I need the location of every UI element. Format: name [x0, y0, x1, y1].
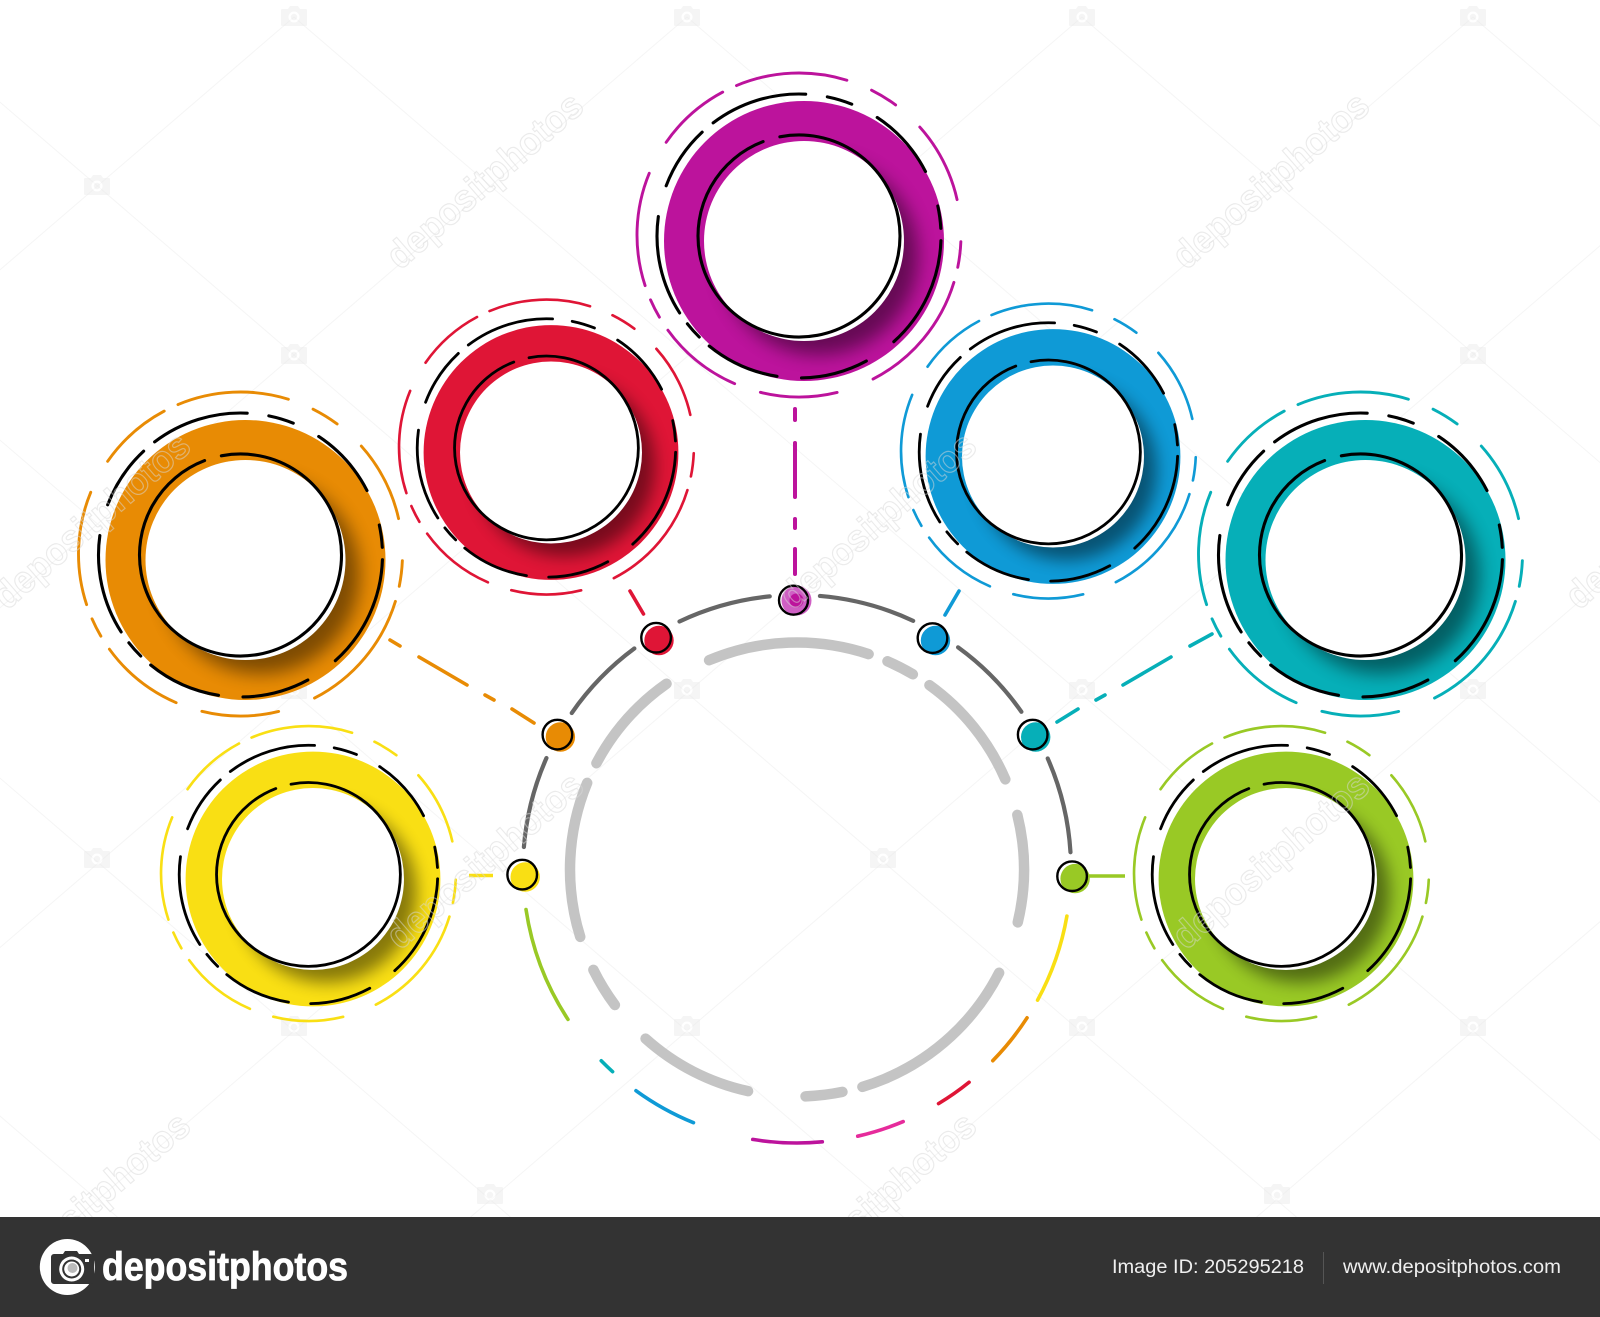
footer bar	[0, 1217, 1600, 1317]
node: blue	[918, 623, 950, 655]
watermark camera icons	[84, 6, 1486, 1204]
footer divider	[1323, 1252, 1324, 1284]
node: purple	[779, 586, 812, 616]
hub arc: dark grey upper segments	[414, 486, 1180, 1252]
watermark text: depositphotos	[1165, 84, 1378, 277]
watermark text: depositphotos	[379, 84, 592, 277]
ring: green	[1089, 681, 1474, 1066]
image id: Image ID: 205295218	[1112, 1257, 1304, 1278]
node: yellow	[507, 860, 540, 892]
ring: red	[354, 254, 739, 640]
central dashed grey circle	[500, 572, 1094, 1167]
footer logo icon: camera	[40, 1239, 95, 1295]
hub arc: coloured lower segments	[410, 482, 1184, 1256]
connector: blue	[945, 591, 959, 615]
connector: yellow	[469, 874, 493, 877]
watermark text: depositphotos	[772, 424, 985, 617]
connector: purple	[793, 409, 797, 574]
node: red	[641, 623, 674, 655]
connector: red	[630, 591, 644, 614]
node: green	[1057, 861, 1090, 893]
website address: www.depositphotos.com	[1342, 1257, 1561, 1278]
watermark text: depositphotos	[772, 1104, 985, 1297]
connector: green	[1087, 874, 1125, 878]
ring: purple	[587, 23, 1011, 447]
node: teal	[1018, 720, 1050, 752]
connector: orange	[390, 640, 534, 723]
watermark text: depositphotos	[379, 764, 592, 957]
ring: blue	[856, 258, 1241, 644]
footer logo wordmark: depositphotos	[102, 1245, 348, 1289]
watermark text: depositphotos	[1165, 764, 1378, 957]
node: orange	[543, 720, 575, 752]
ring: yellow	[116, 681, 501, 1066]
ring: teal	[1149, 342, 1572, 766]
ring: orange	[29, 342, 452, 766]
connector: teal	[1057, 634, 1212, 722]
